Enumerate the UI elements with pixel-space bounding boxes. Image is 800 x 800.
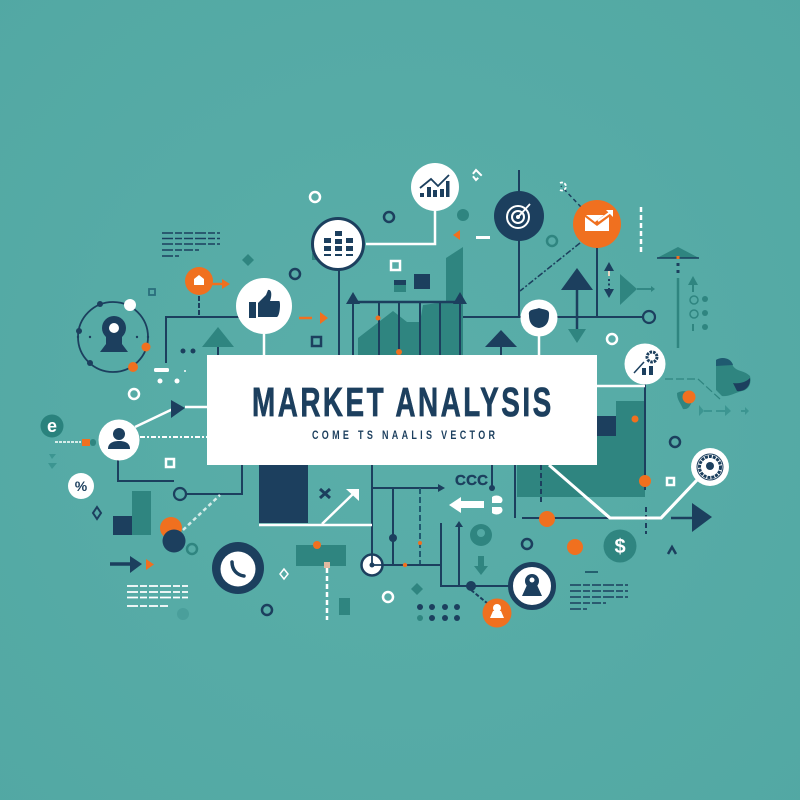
icon: dollar badge: $	[614, 536, 626, 558]
arrow right	[671, 503, 712, 532]
icon: poker chip badge	[691, 448, 729, 486]
icon: cloche badge	[520, 300, 558, 336]
teal blob cluster right	[665, 358, 751, 416]
icon: user ring bottom right	[510, 564, 554, 608]
icon: orange user badge	[482, 598, 512, 628]
dot matrix	[417, 604, 460, 621]
orange dots right	[539, 475, 651, 555]
text block: top left	[162, 233, 220, 256]
icon: thumbs up	[236, 278, 292, 334]
subtitle: COME TS NAALIS VECTOR	[312, 429, 495, 442]
title: MARKET ANALYSIS	[252, 380, 551, 425]
teal keyhole and down arrow	[470, 524, 492, 575]
overlapping circles	[160, 517, 186, 552]
ring connector start	[174, 488, 186, 500]
icon: bar grid badge	[312, 218, 364, 270]
arrowhead to panel	[171, 400, 185, 418]
arrow bottom left	[110, 556, 154, 573]
bottom centre flow markers	[362, 484, 495, 591]
white small marker near envelope	[560, 183, 566, 190]
re-drawn lines over stepped panel	[541, 401, 697, 518]
text block: bottom left	[127, 586, 188, 606]
icon: percent badge: %	[75, 478, 88, 494]
icon: orange badge with arrow	[185, 267, 230, 295]
text block: bottom right	[570, 572, 628, 609]
icon: user ring orbit	[76, 299, 150, 372]
icon: umbrella marker column	[657, 247, 708, 348]
stepped teal panel right	[517, 401, 645, 497]
icon: percent badge	[68, 473, 94, 499]
icon: envelope badge	[573, 200, 621, 248]
connector network	[118, 170, 646, 603]
panel: title card	[207, 355, 597, 465]
icon: person badge	[98, 420, 140, 460]
label: ccc: CCC	[455, 472, 488, 489]
icon: e badge	[40, 414, 64, 438]
icon: phone badge	[212, 542, 264, 594]
scattered rings and markers	[93, 170, 680, 620]
dashed tag with orange marker	[48, 439, 96, 469]
icon: e badge: e	[47, 416, 57, 436]
white connector lines	[135, 207, 697, 620]
small bar chart left	[113, 491, 151, 535]
small squares above chart	[391, 261, 430, 292]
arrows and triangles upper right	[485, 262, 655, 355]
navy block with rising arrow	[259, 465, 359, 524]
icon: target badge	[494, 191, 544, 241]
area chart with grid	[346, 247, 467, 355]
marker group under left line	[154, 327, 234, 384]
icon: dollar badge	[604, 530, 636, 562]
icon: growth chart badge	[411, 163, 459, 211]
icon: gear chart badge	[624, 344, 666, 384]
white arrow left	[449, 495, 503, 515]
teal bar with marker	[296, 541, 346, 568]
